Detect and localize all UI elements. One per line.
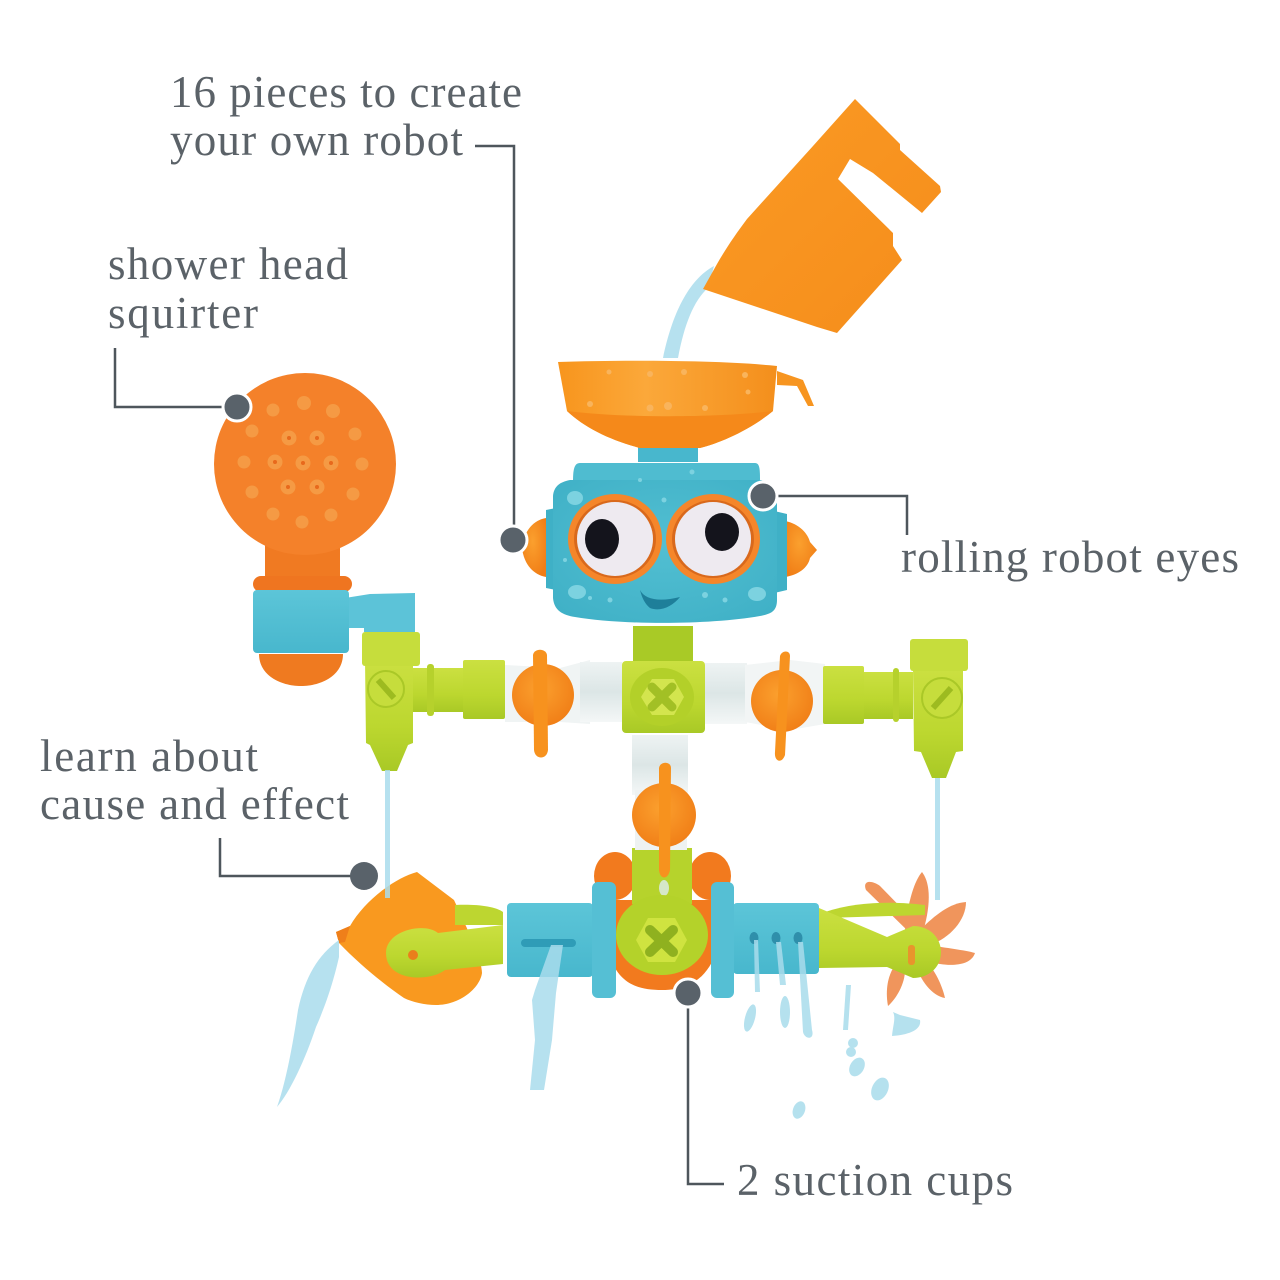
- label: 16 pieces to create your own robot: [170, 67, 522, 165]
- label: rolling robot eyes: rolling robot eyes: [901, 532, 1239, 582]
- label: shower head squirter: squirter: [108, 288, 258, 338]
- connector: robot eyes: [749, 482, 907, 535]
- connector: cause and effect: [220, 838, 378, 890]
- label: learn about cause and effect: cause and effect: [40, 779, 349, 829]
- toy: left valve: [512, 650, 574, 758]
- toy: right valve: [751, 652, 813, 761]
- toy: orange funnel: [558, 361, 814, 462]
- toy: shower head squirter: [214, 373, 415, 686]
- toy: orange scoop: [336, 872, 482, 1005]
- toy: right arm pipe: [823, 639, 968, 778]
- toy: left arm pipe: [362, 632, 505, 771]
- label: 16 pieces to create your own robot: your own robot: [170, 115, 463, 165]
- label: learn about cause and effect: learn about: [40, 731, 258, 781]
- toy: middle valve: [632, 763, 696, 904]
- connector: shower head: [115, 348, 251, 421]
- toy: orange water wheel: [865, 872, 975, 1006]
- connector: 16 pieces to robot: [475, 146, 527, 554]
- label: shower head squirter: shower head: [108, 239, 348, 289]
- toy: centre white pipes and hub: [505, 626, 825, 795]
- toy: robot head: [522, 463, 817, 623]
- toy: suction cup flower: [594, 852, 731, 990]
- water streams and droplets: [277, 770, 940, 1121]
- toy: bottom blue pipe: [507, 882, 819, 998]
- label: 16 pieces to create your own robot: 16 pieces to create: [170, 67, 522, 117]
- toy: water jug pouring: [663, 99, 941, 358]
- toy: left bracket: [386, 905, 503, 978]
- label: 2 suction cups: 2 suction cups: [737, 1155, 1013, 1205]
- label: shower head squirter: [108, 239, 348, 338]
- label: learn about cause and effect: [40, 731, 349, 829]
- toy: right bracket: [819, 903, 941, 978]
- connector: suction cups: [674, 979, 724, 1184]
